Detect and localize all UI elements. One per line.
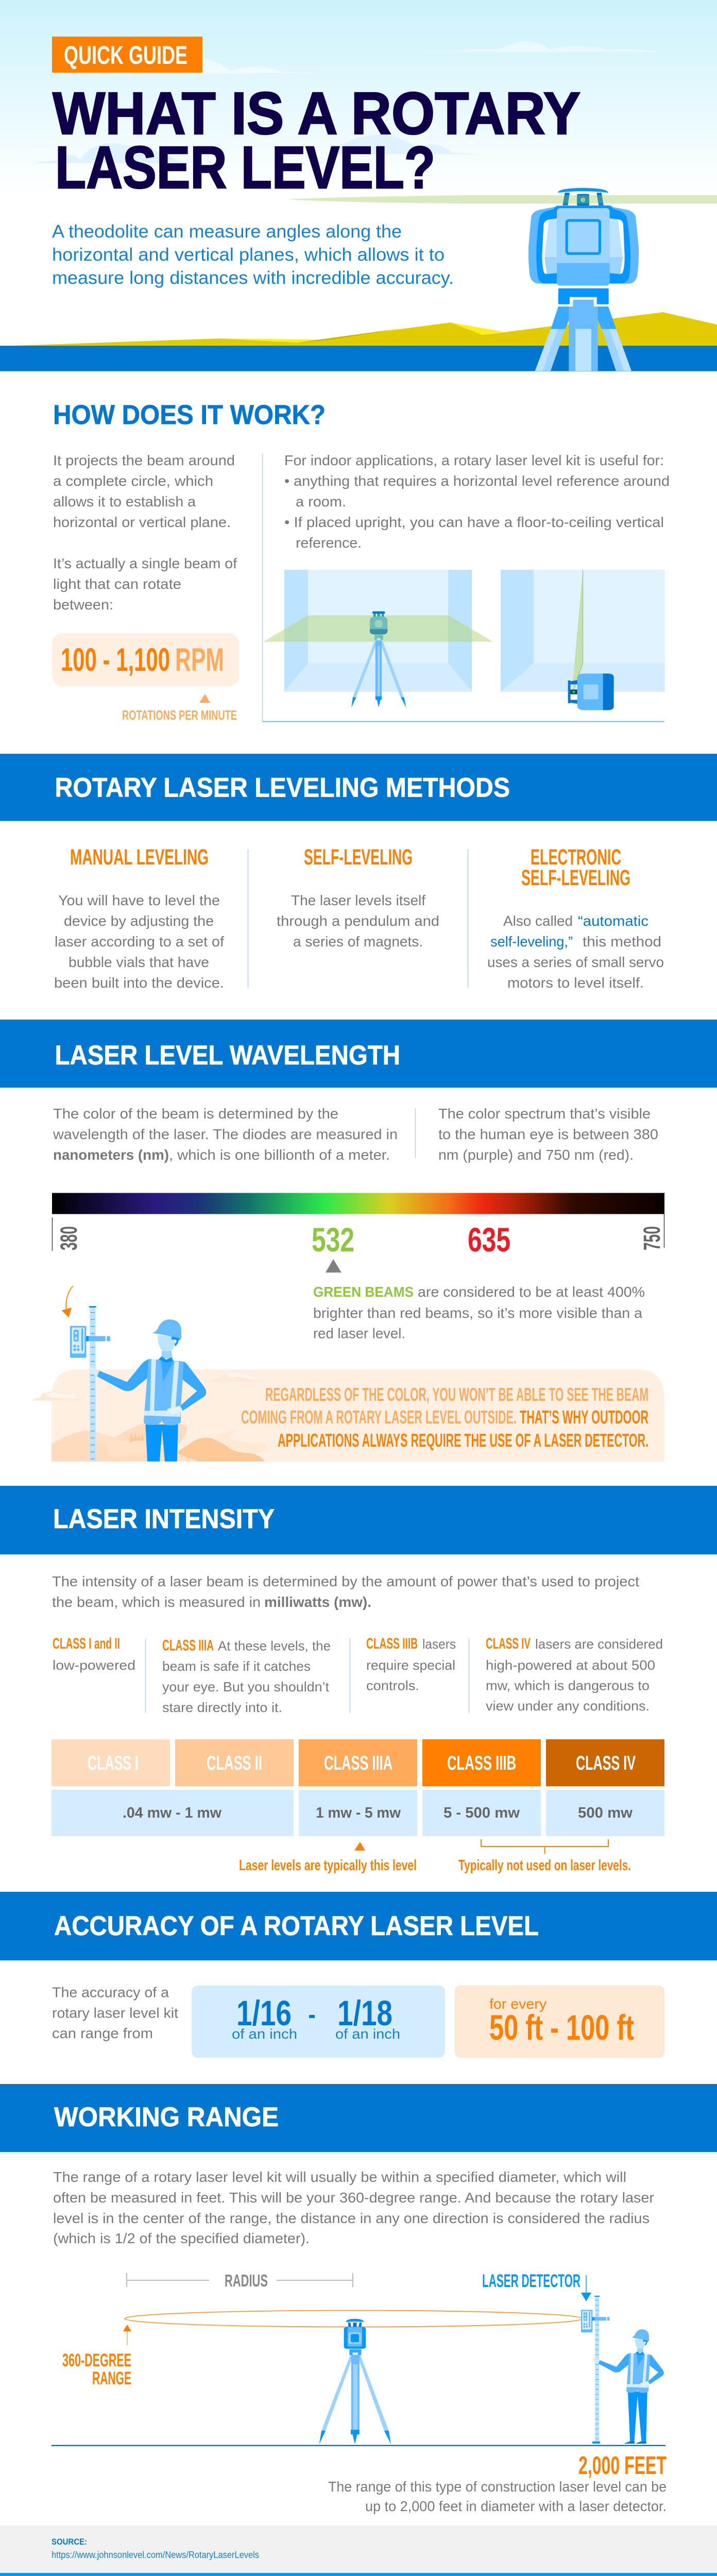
- method: self-leveling: [277, 845, 439, 950]
- laser plane ellipse: [125, 2310, 583, 2327]
- text block: green beams: GREEN BEAMS: [313, 1284, 414, 1300]
- text block: intensity intro: The intensity of a laser beam is determined by the amount of power that’s used to project: [52, 1573, 639, 1589]
- text block: 2,000 feet: The range of this type of construction laser level can be: [328, 2479, 667, 2495]
- method: self-leveling: SELF-LEVELING: [304, 845, 413, 870]
- text: class IIIA: stare directly into it.: [162, 1700, 282, 1715]
- text block: wavelength left: wavelength of the laser. The diodes are measured in: [53, 1126, 398, 1142]
- method: manual leveling: bubble vials that have: [69, 954, 209, 970]
- table: laser classes: CLASS IIIA: [324, 1752, 392, 1774]
- method: self-leveling: The laser levels itself: [291, 892, 425, 908]
- annotation: not used classes: [458, 1839, 631, 1874]
- detector on rod: [581, 2296, 609, 2444]
- text block: how it works left: light that can rotate: [53, 576, 181, 592]
- ground line: [52, 2445, 665, 2446]
- text block: accuracy: The accuracy of a: [52, 1985, 169, 2000]
- method: electronic self-leveling: uses a series of small servo: [487, 954, 664, 970]
- text: class IIIA: At these levels, the: [218, 1638, 331, 1654]
- text block: wavelength right: to the human eye is between 380: [438, 1126, 658, 1142]
- badge: quick guide: QUICK GUIDE: [64, 41, 187, 70]
- method: electronic self-leveling: this method: [583, 934, 661, 950]
- chart: color spectrum: 750: [639, 1226, 665, 1250]
- text block: how it works left: a complete circle, which: [53, 473, 213, 489]
- laser detector label: [482, 2271, 591, 2301]
- text: class IIIB: CLASS IIIB: [366, 1635, 418, 1652]
- method: electronic self-leveling: SELF-LEVELING: [521, 866, 630, 890]
- text block: how it works left: horizontal or vertical plane.: [53, 514, 231, 530]
- method: electronic self-leveling: “automatic: [578, 913, 648, 929]
- text block: how it works left: It’s actually a single beam of: [53, 555, 237, 571]
- hills: [51, 1418, 267, 1462]
- method: electronic self-leveling: self-leveling,”: [490, 934, 573, 950]
- text block: 2,000 feet: 2,000 FEET: [578, 2452, 667, 2480]
- annotation: not used classes: Typically not used on laser levels.: [458, 1857, 631, 1874]
- footer: [0, 2573, 717, 2576]
- callout: fractions: [192, 1986, 445, 2058]
- room one: [263, 570, 493, 707]
- callout: RPM: [52, 633, 239, 723]
- annotation: typical class: Laser levels are typically this level: [239, 1857, 417, 1874]
- section banner: laser intensity: [0, 1486, 717, 1554]
- table: laser classes: 500 mw: [578, 1805, 633, 1821]
- clouds: [31, 1372, 265, 1400]
- text: class I and II: CLASS I and II: [53, 1635, 120, 1652]
- intro text: [52, 222, 454, 288]
- blue ground band: [0, 346, 717, 371]
- yellow hills: [14, 312, 717, 346]
- text block: how it works right: reference.: [296, 535, 362, 551]
- source panel: https://www.johnsonlevel.com/News/RotaryLaserLevels: [52, 2550, 259, 2560]
- text block: wavelength left: The color of the beam is determined by the: [53, 1106, 338, 1122]
- section banner: leveling methods: [0, 754, 717, 821]
- table: laser classes: 5 - 500 mw: [443, 1805, 520, 1821]
- text block: how it works left: allows it to establish a: [53, 494, 196, 510]
- callout: fractions: of an inch: [232, 2026, 297, 2042]
- text block: how it works right: [284, 452, 670, 551]
- text block: green beams: red laser level.: [313, 1325, 405, 1342]
- text: class IV: CLASS IV: [486, 1635, 531, 1652]
- text: class IIIA: [162, 1637, 331, 1715]
- worker: [593, 2329, 664, 2444]
- text block: intensity intro: the beam, which is measured in: [52, 1594, 261, 1610]
- intro text: horizontal and vertical planes, which allows it to: [52, 245, 445, 265]
- text: class IIIB: lasers: [422, 1636, 456, 1652]
- text block: working range: level is in the center of the range, the distance in any one direction is considered the radius: [53, 2210, 650, 2226]
- title: LASER LEVEL?: [55, 134, 435, 201]
- text block: wavelength left: , which is one billionth of a meter.: [169, 1147, 390, 1163]
- annotation: typical class: [239, 1842, 417, 1874]
- method: electronic self-leveling: [487, 845, 664, 991]
- room two: [501, 570, 665, 710]
- 360-degree label: RANGE: [92, 2368, 131, 2388]
- table: laser classes: CLASS II: [207, 1752, 262, 1774]
- illustration: rooms with laser planes: [263, 570, 665, 710]
- callout: RPM: 100 - 1,100: [61, 642, 170, 678]
- text: class IV: lasers are considered: [535, 1636, 663, 1652]
- clouds: [30, 41, 661, 163]
- text: class IIIA: beam is safe if it catches: [162, 1658, 311, 1674]
- panel: outdoor detector note: [31, 1286, 664, 1462]
- text block: how it works right: For indoor applications, a rotary laser level kit is useful for:: [284, 452, 664, 468]
- callout: distance: [454, 1986, 664, 2058]
- text block: accuracy: [52, 1985, 178, 2041]
- callout: fractions: 1/18: [337, 1993, 392, 2033]
- text: class I and II: [53, 1635, 135, 1673]
- icon: rotary laser level on tripod: [528, 188, 639, 371]
- callout: fractions: of an inch: [335, 2026, 400, 2042]
- title: [53, 80, 581, 201]
- text block: wavelength left: nanometers (nm): [53, 1147, 169, 1163]
- table: laser classes: [52, 1739, 664, 1836]
- method: manual leveling: MANUAL LEVELING: [70, 845, 209, 870]
- text: class IV: high-powered at about 500: [486, 1657, 655, 1673]
- text block: how it works left: [53, 452, 237, 613]
- source panel: [0, 2526, 717, 2573]
- method: electronic self-leveling: motors to level itself.: [507, 975, 644, 991]
- table: laser classes: CLASS IV: [576, 1752, 636, 1774]
- method: manual leveling: laser according to a set of: [55, 934, 224, 950]
- text block: how it works right: • anything that requires a horizontal level reference around: [284, 473, 670, 489]
- text: class IIIB: require special: [366, 1657, 455, 1673]
- text block: 2,000 feet: [328, 2452, 667, 2514]
- text block: accuracy: rotary laser level kit: [52, 2005, 178, 2021]
- intro text: measure long distances with incredible accuracy.: [52, 268, 454, 288]
- text block: wavelength right: The color spectrum that’s visible: [438, 1106, 651, 1122]
- source panel: SOURCE:: [52, 2537, 87, 2547]
- text block: 2,000 feet: up to 2,000 feet in diameter with a laser detector.: [365, 2498, 667, 2514]
- callout: RPM: ROTATIONS PER MINUTE: [122, 707, 237, 723]
- text: class IV: mw, which is dangerous to: [486, 1677, 650, 1693]
- text block: intensity intro: [52, 1573, 639, 1610]
- text block: working range: often be measured in feet. This will be your 360-degree range. And because the rotary laser: [53, 2190, 654, 2206]
- text: class IIIB: controls.: [366, 1677, 419, 1693]
- text block: working range: [53, 2169, 654, 2246]
- arrow: to detector: [62, 1286, 73, 1317]
- section banner: working range: WORKING RANGE: [54, 2102, 279, 2132]
- method: electronic self-leveling: Also called: [503, 913, 573, 929]
- hero section: [0, 0, 717, 371]
- chart: color spectrum: [52, 1193, 665, 1273]
- text block: wavelength left: [53, 1106, 398, 1163]
- section banner: working range: [0, 2084, 717, 2152]
- heading: how does it work: HOW DOES IT WORK?: [53, 400, 326, 430]
- table: laser classes: CLASS I: [88, 1752, 139, 1774]
- method: self-leveling: a series of magnets.: [293, 934, 423, 950]
- illustration: worker with rod and detector: [70, 1306, 206, 1462]
- text: class IIIA: CLASS IIIA: [162, 1637, 214, 1654]
- green laser beam: [287, 195, 717, 204]
- text block: how it works left: It projects the beam around: [53, 452, 235, 468]
- text: class IIIA: your eye. But you shouldn’t: [162, 1679, 330, 1694]
- text block: intensity intro: milliwatts (mw).: [264, 1594, 371, 1610]
- callout: distance: for every: [489, 1996, 547, 2012]
- section banner: laser intensity: LASER INTENSITY: [53, 1504, 275, 1534]
- method: manual leveling: device by adjusting the: [64, 913, 214, 929]
- section banner: accuracy: [0, 1892, 717, 1960]
- text: class IV: [486, 1635, 663, 1714]
- section banner: wavelength: [0, 1020, 717, 1088]
- text block: how it works left: between:: [53, 597, 113, 613]
- text: class I and II: low-powered: [53, 1657, 135, 1673]
- laser detector label: LASER DETECTOR: [482, 2271, 581, 2291]
- radius label: [127, 2271, 353, 2290]
- text block: green beams: brighter than red beams, so it’s more visible than a: [313, 1305, 642, 1321]
- text block: wavelength right: [438, 1106, 658, 1163]
- callout: distance: 50 ft - 100 ft: [489, 2008, 634, 2047]
- badge: quick guide: [52, 37, 202, 73]
- callout: fractions: 1/16: [236, 1993, 292, 2033]
- text block: working range: The range of a rotary laser level kit will usually be within a specified diameter, which will: [53, 2169, 626, 2185]
- table: laser classes: 1 mw - 5 mw: [316, 1805, 401, 1821]
- method: electronic self-leveling: ELECTRONIC: [531, 845, 621, 870]
- text block: green beams: are considered to be at least 400%: [418, 1284, 645, 1300]
- text: class IIIB: [366, 1635, 456, 1693]
- text block: green beams: [313, 1284, 645, 1342]
- callout: RPM: RPM: [175, 642, 224, 678]
- diagram: working range: [52, 2271, 665, 2446]
- table: laser classes: CLASS IIIB: [447, 1752, 516, 1774]
- text block: working range: (which is 1/2 of the specified diameter).: [53, 2230, 310, 2246]
- chart: color spectrum: 635: [468, 1221, 510, 1259]
- chart: color spectrum: 380: [56, 1226, 82, 1250]
- 360-degree label: [62, 2325, 131, 2388]
- text: class IV: view under any conditions.: [486, 1698, 650, 1714]
- method: self-leveling: through a pendulum and: [277, 913, 439, 929]
- section banner: leveling methods: ROTARY LASER LEVELING METHODS: [55, 773, 510, 803]
- title: WHAT IS A ROTARY: [53, 80, 581, 147]
- method: manual leveling: You will have to level the: [58, 892, 220, 908]
- text block: wavelength right: nm (purple) and 750 nm (red).: [438, 1147, 634, 1163]
- callout text: [241, 1384, 648, 1451]
- intro text: A theodolite can measure angles along the: [52, 222, 402, 242]
- text block: how it works right: • If placed upright, you can have a floor-to-ceiling vertical: [284, 514, 664, 530]
- text block: how it works right: a room.: [296, 494, 346, 510]
- section banner: wavelength: LASER LEVEL WAVELENGTH: [55, 1040, 400, 1071]
- callout text: COMING FROM A ROTARY LASER LEVEL OUTSIDE.: [241, 1406, 517, 1428]
- method: manual leveling: been built into the device.: [54, 975, 224, 991]
- chart: color spectrum: 532: [312, 1221, 354, 1259]
- icon: level on tripod: [319, 2319, 391, 2444]
- table: laser classes: .04 mw - 1 mw: [123, 1805, 221, 1821]
- 360-degree label: 360-DEGREE: [62, 2350, 131, 2370]
- text block: accuracy: can range from: [52, 2025, 153, 2041]
- method: manual leveling: [54, 845, 224, 991]
- section banner: accuracy: ACCURACY OF A ROTARY LASER LEVEL: [54, 1911, 539, 1941]
- radius label: RADIUS: [225, 2271, 268, 2290]
